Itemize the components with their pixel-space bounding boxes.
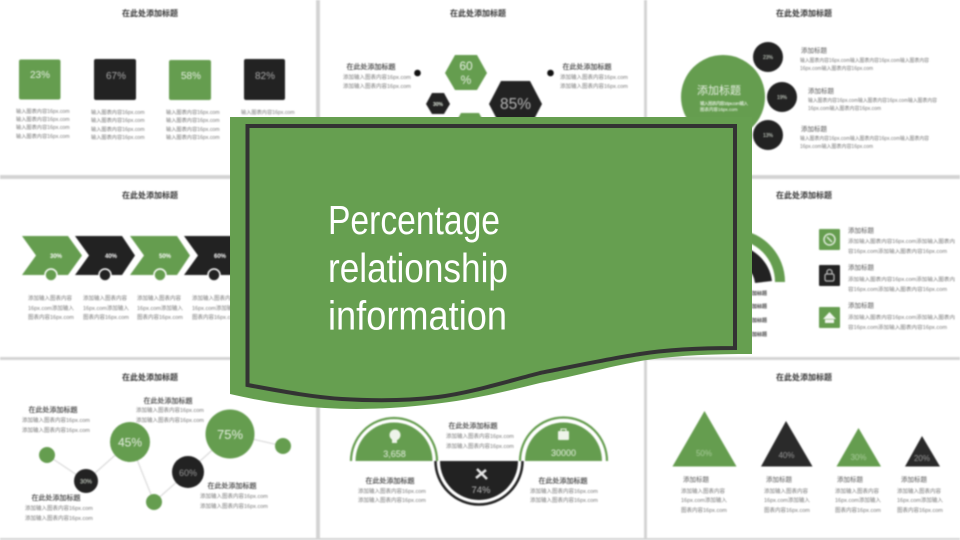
bubble text 2: 添加输入图表内容16px.com <box>136 416 204 424</box>
triangle text 1: 添加输入图表内容 <box>681 487 726 495</box>
list text 1: 输入图表内容16px.com输入图表内容16px.com输入图表内容 <box>800 56 929 64</box>
chevron captions: 16px.com添加输入 <box>83 304 129 312</box>
chevron captions: 添加输入图表内容 <box>137 294 182 302</box>
chevron captions: 16px.com添加输入 <box>137 304 183 312</box>
triangle text 2: 图表内容16px.com <box>764 506 810 514</box>
right text: 添加输入图表内容16px.com <box>530 487 598 495</box>
arc legend: 添加标题 <box>747 317 767 324</box>
chevron: 60% <box>184 236 245 281</box>
icon text 1: 添加标题 <box>848 226 874 234</box>
arc legend: 添加标题 <box>747 303 767 310</box>
banner title text: relationship <box>328 245 508 291</box>
bubble text 4: 添加输入图表内容16px.com <box>200 492 268 500</box>
list text 3: 输入图表内容16px.com输入图表内容16px.com输入图表内容 <box>800 134 929 142</box>
chevron captions: 图表内容16px.com <box>192 313 238 321</box>
chevron captions: 图表内容16px.com <box>28 313 74 321</box>
chevron captions: 添加输入图表内容 <box>83 294 128 302</box>
square: 82% <box>244 59 285 100</box>
center text: 添加输入图表内容16px.com <box>446 432 514 440</box>
panel heading: 在此处添加标题 <box>776 8 832 18</box>
panel heading: 在此处添加标题 <box>122 8 178 18</box>
large green circle: 输入图表内容16px.com输入 <box>700 100 748 107</box>
square: 67% <box>94 59 136 100</box>
triangle: 30% <box>836 428 881 466</box>
right semicircle: 30000 <box>520 418 607 461</box>
icon text 3: 添加标题 <box>848 300 874 310</box>
panel heading: 在此处添加标题 <box>122 372 178 382</box>
triangle text 2: 添加标题 <box>766 474 792 484</box>
square: 58%: 58% <box>181 71 201 82</box>
bubble text 4 <box>200 481 268 510</box>
icon: phone <box>819 229 840 250</box>
circle: 13% <box>753 120 783 150</box>
hexagon: 30% <box>426 93 450 114</box>
bubble text 3: 添加输入图表内容16px.com <box>25 504 93 512</box>
chevron: 30% <box>22 236 82 281</box>
arc legend: 添加标题 <box>747 290 767 297</box>
circle: 23% <box>753 42 783 72</box>
bubble: small green 2 <box>146 494 162 510</box>
bubble: 30% <box>74 469 98 493</box>
triangle text 3: 添加输入图表内容 <box>835 487 880 495</box>
hexagon: partly hidden <box>456 113 484 122</box>
circle: 13%: 13% <box>763 133 774 139</box>
panel heading: 在此处添加标题 <box>776 190 832 200</box>
square captions: 输入图表内容16px.com <box>166 116 220 124</box>
chevron captions: 添加输入图表内容 <box>28 294 73 302</box>
hexagon: 60%: % <box>461 73 472 87</box>
arc legend: 添加标题 <box>747 331 767 338</box>
square captions: 输入图表内容16px.com <box>16 123 70 131</box>
panel: circle list <box>681 8 937 150</box>
center semicircle: 74%: 74% <box>471 485 491 496</box>
panel: chevrons <box>22 190 245 321</box>
square: 23%: 23% <box>30 70 50 81</box>
panel heading: 在此处添加标题 <box>776 372 832 382</box>
chevron: 30%: 30% <box>50 254 63 260</box>
banner title text: Percentage <box>328 197 500 243</box>
banner green shape <box>230 117 752 409</box>
circle: 19% <box>767 82 797 112</box>
bubble text 1 <box>22 405 90 434</box>
triangle text 4: 图表内容16px.com <box>897 506 943 514</box>
list text 1: 添加标题 <box>801 46 828 54</box>
square captions: 输入图表内容16px.com <box>16 107 70 115</box>
triangle: 40% <box>761 421 812 466</box>
icon text 3: 容16px.com添加输入图表内容16px.com <box>848 323 947 331</box>
right text block: 添加输入图表内容16px.com <box>560 73 628 81</box>
hexagon: 60%: 60 <box>459 59 473 73</box>
left text block: 在此处添加标题 <box>346 62 396 71</box>
list text 3: 添加标题 <box>801 124 828 133</box>
right text: 添加输入图表内容16px.com <box>530 496 598 504</box>
triangle text 1: 图表内容16px.com <box>681 506 727 514</box>
bubble text 2 <box>136 396 204 424</box>
panel heading: 在此处添加标题 <box>450 8 506 18</box>
square captions: 输入图表内容16px.com <box>166 125 220 133</box>
left text: 添加输入图表内容16px.com <box>358 487 426 495</box>
square captions: 输入图表内容16px.com <box>241 108 295 116</box>
panel: arc and icon list <box>685 190 955 338</box>
left text block: 添加输入图表内容16px.com <box>343 73 411 81</box>
square captions: 输入图表内容16px.com <box>91 108 145 116</box>
banner dark outline <box>248 126 735 400</box>
large green circle: 图表内容16px.com <box>700 106 738 113</box>
icon text 3: 添加输入图表内容16px.com添加输入图表内 <box>848 313 955 321</box>
left text block <box>343 62 411 90</box>
panel heading: 在此处添加标题 <box>122 190 178 200</box>
left text: 添加输入图表内容16px.com <box>358 496 426 504</box>
bubble text 4: 在此处添加标题 <box>208 481 256 490</box>
icon text 1 <box>848 226 955 255</box>
icon text 1: 容16px.com添加输入图表内容16px.com <box>848 247 947 255</box>
triangle: 20%: 20% <box>914 454 930 463</box>
banner title text <box>328 197 508 338</box>
triangle: 50%: 50% <box>696 449 712 458</box>
triangle: 30%: 30% <box>850 453 867 462</box>
square: 67%: 67% <box>106 71 126 82</box>
panel: bubble line <box>22 372 291 522</box>
arc gauge <box>685 235 780 282</box>
chevron: 40% <box>75 236 135 281</box>
icon text 1: 添加输入图表内容16px.com添加输入图表内 <box>848 237 955 245</box>
banner title text: information <box>328 292 507 338</box>
triangle text 2: 添加输入图表内容 <box>764 487 809 495</box>
center text <box>446 421 514 450</box>
left semicircle: 3,658 <box>351 418 437 461</box>
bubble: 75% <box>206 410 254 458</box>
hexagon: 85% <box>489 81 542 127</box>
icon: lock <box>819 265 840 286</box>
chevron captions: 16px.com添加输入 <box>28 304 74 312</box>
bubble: 45%: 45% <box>118 436 142 450</box>
triangle text 1: 添加标题 <box>683 474 710 484</box>
triangle text 2: 16px.com添加输入 <box>764 496 810 504</box>
list text 2 <box>808 86 937 112</box>
list text 1: 16px.com输入图表内容16px.com <box>800 64 873 72</box>
bubble: 30%: 30% <box>80 480 93 486</box>
chevron: 40%: 40% <box>105 254 118 260</box>
bubble text 3: 添加输入图表内容16px.com <box>25 514 93 522</box>
chevron captions <box>28 294 238 321</box>
square captions <box>16 107 295 141</box>
marker dots <box>414 70 554 76</box>
chevron: 60%: 60% <box>214 254 227 260</box>
triangle text 2 <box>764 474 810 514</box>
square captions: 输入图表内容16px.com <box>91 133 145 141</box>
triangle text 4: 添加标题 <box>901 474 928 484</box>
icon: home <box>819 307 840 328</box>
center text: 添加输入图表内容16px.com <box>446 442 514 450</box>
left semicircle: 3,658: 3,658 <box>383 449 406 459</box>
bubble text 1: 在此处添加标题 <box>28 405 78 414</box>
triangle text 4: 添加输入图表内容 <box>897 487 942 495</box>
center text: 在此处添加标题 <box>448 421 498 430</box>
square captions: 输入图表内容16px.com <box>91 125 145 133</box>
bubble text 3 <box>25 493 93 522</box>
panel: semicircles <box>351 418 607 504</box>
connector lines <box>47 434 283 502</box>
bubble text 2: 在此处添加标题 <box>144 396 192 405</box>
square captions: 输入图表内容16px.com <box>166 108 220 116</box>
list text 3 <box>800 124 929 150</box>
icon text 2 <box>848 262 955 293</box>
triangle text 1: 16px.com添加输入 <box>681 496 727 504</box>
bubble: 75%: 75% <box>217 427 243 442</box>
panel: triangles <box>672 372 943 514</box>
right text block <box>560 62 628 90</box>
chevron: 50%: 50% <box>159 254 172 260</box>
square captions: 输入图表内容16px.com <box>16 132 70 140</box>
bubble: 45% <box>110 422 150 462</box>
icon text 2: 添加标题 <box>848 262 874 272</box>
hexagon: 60% <box>445 55 487 90</box>
list text 2: 16px.com输入图表内容16px.com <box>808 104 881 112</box>
bubble text 3: 在此处添加标题 <box>32 493 80 502</box>
list text 2: 添加标题 <box>808 86 834 95</box>
chevron captions: 图表内容16px.com <box>83 313 129 321</box>
large green circle: 添加标题 <box>697 83 741 97</box>
triangle text 3: 添加标题 <box>837 474 864 484</box>
left text block: 添加输入图表内容16px.com <box>343 82 411 90</box>
bubble: 60% <box>172 456 204 488</box>
list text 1 <box>800 46 929 72</box>
right text <box>530 476 598 504</box>
right semicircle: 30000: 30000 <box>551 448 576 458</box>
bubble text 4: 添加输入图表内容16px.com <box>200 502 268 510</box>
square captions: 输入图表内容16px.com <box>166 133 220 141</box>
circle: 19%: 19% <box>777 95 788 101</box>
bubble text 1: 添加输入图表内容16px.com <box>22 426 90 434</box>
square captions: 输入图表内容16px.com <box>91 116 145 124</box>
bubble text 1: 添加输入图表内容16px.com <box>22 416 90 424</box>
square: 82%: 82% <box>255 71 275 82</box>
right text block: 添加输入图表内容16px.com <box>560 82 628 90</box>
list text 3: 16px.com输入图表内容16px.com <box>800 142 873 150</box>
hexagon: 85%: 85% <box>500 96 531 113</box>
triangle text 3 <box>835 474 881 514</box>
left text: 在此处添加标题 <box>366 476 414 485</box>
chevron: 50% <box>130 236 190 281</box>
icon text 2: 添加输入图表内容16px.com添加输入图表内 <box>848 275 955 283</box>
square: 58% <box>169 60 211 100</box>
triangle text 3: 16px.com添加输入 <box>835 496 881 504</box>
list text 2: 输入图表内容16px.com输入图表内容16px.com输入图表内容 <box>808 96 937 104</box>
triangle text 4 <box>897 474 943 514</box>
right text block: 在此处添加标题 <box>562 62 612 71</box>
triangle: 40%: 40% <box>778 451 795 460</box>
circle: 23%: 23% <box>763 55 774 61</box>
right text: 在此处添加标题 <box>538 476 588 485</box>
bubble: small green 1 <box>39 447 55 463</box>
triangle: 50% <box>672 411 736 466</box>
triangle text 3: 图表内容16px.com <box>835 506 881 514</box>
triangle text 1 <box>681 474 727 514</box>
bubble: small green 3 <box>275 438 291 454</box>
panel: hexagons <box>343 8 628 127</box>
bubble: 60%: 60% <box>179 468 197 478</box>
left text <box>358 476 426 504</box>
icon text 2: 容16px.com添加输入图表内容16px.com <box>848 285 947 293</box>
chevron captions: 添加输入图表内容 <box>192 294 237 302</box>
chevron captions: 16px.com添加输入 <box>192 304 238 312</box>
banner: main title <box>230 117 752 409</box>
triangle: 20% <box>905 436 940 466</box>
hexagon: 30%: 30% <box>433 102 444 108</box>
large green circle <box>681 55 765 139</box>
icon text 3 <box>848 300 955 331</box>
triangle text 4: 16px.com添加输入 <box>897 496 943 504</box>
arc legend <box>747 290 767 338</box>
center semicircle: 74% <box>436 461 522 504</box>
bubble text 2: 添加输入图表内容16px.com <box>136 406 204 414</box>
square captions: 输入图表内容16px.com <box>16 115 70 123</box>
square: 23% <box>19 60 60 100</box>
panel: percentage squares <box>16 8 295 141</box>
chevron captions: 图表内容16px.com <box>137 313 183 321</box>
